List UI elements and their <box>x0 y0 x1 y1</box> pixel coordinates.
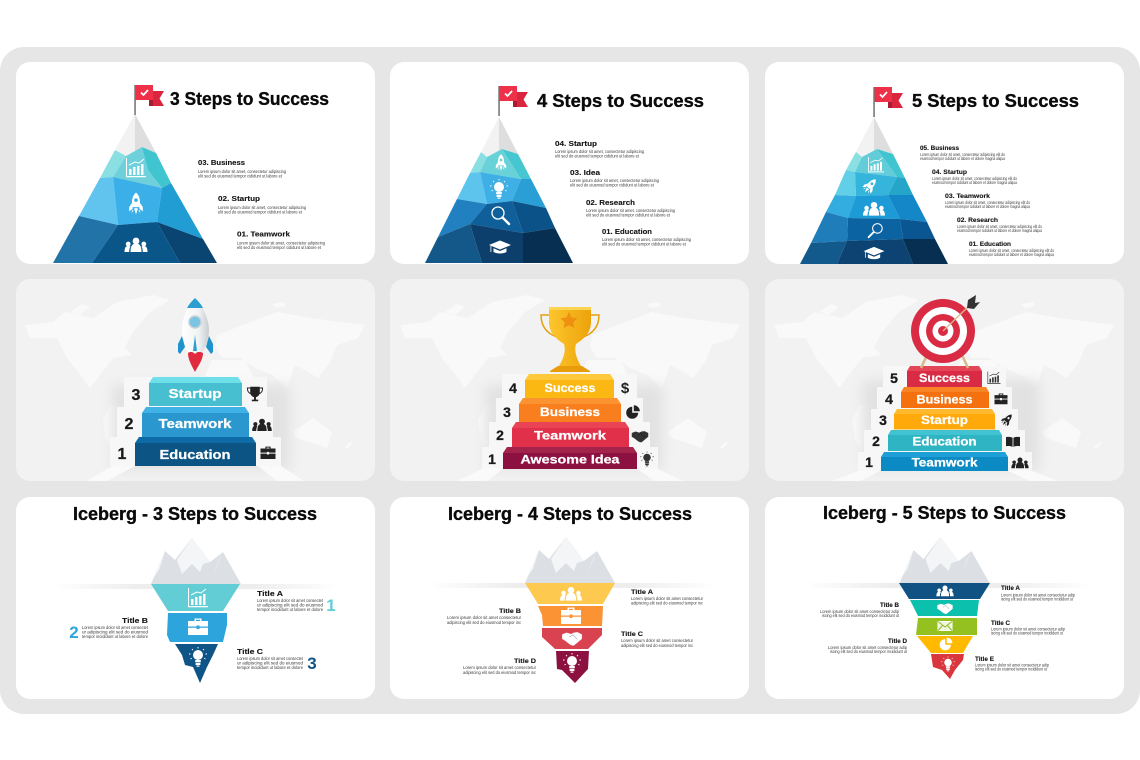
text: teamwork: Lorem ipsum dolor sit amet, consectetur adipiscing <box>237 240 326 246</box>
text: business: 05. Business <box>920 145 959 152</box>
icon: briefcase <box>188 618 208 635</box>
text: research <box>586 198 676 218</box>
text: teamwork: elit sed do eiusmod tempor cididunt ut labore et <box>237 245 322 250</box>
text: title b: ur adipiscing elit sed do eiusmod <box>82 630 149 634</box>
section 5 <box>931 654 964 679</box>
text: title c <box>991 621 1066 636</box>
text: title e: Lorem ipsum dolor sit amet consectetur adip <box>975 662 1050 668</box>
text: title a: adipiscing elit sed do eiusmod tempor inc <box>631 600 703 606</box>
icon: rocket <box>861 176 880 195</box>
step 2: teamwork: Teamwork <box>534 428 606 442</box>
step 5: success <box>907 366 982 387</box>
stone steps <box>858 366 1032 471</box>
text: title d: adipiscing elit sed do eiusmod tempor inc <box>463 670 536 675</box>
world map <box>774 295 1114 450</box>
text: title c: Lorem ipsum dolor sit amet consectetur adip <box>991 626 1066 632</box>
panel: stairs 5 steps <box>765 279 1124 481</box>
stair shadow <box>485 385 663 470</box>
icon: briefcase <box>561 608 581 624</box>
text: teamwork: 01. Teamwork <box>237 230 291 238</box>
section 2 <box>538 606 603 626</box>
panel: mountain 4 steps <box>390 62 749 264</box>
text: education: Lorem ipsum dolor sit amet, consectetur adipiscing elit do <box>969 248 1055 253</box>
icon: book <box>1006 437 1020 447</box>
text: title c: Title C <box>237 647 264 656</box>
icon: trophy <box>247 387 263 401</box>
iceberg top <box>151 538 241 584</box>
step 3: business: Business <box>540 405 600 419</box>
step numbers: 3 <box>132 387 141 404</box>
icon: chart <box>868 157 884 172</box>
panel: iceberg 5 steps <box>765 497 1124 699</box>
icon: bulb <box>189 647 207 667</box>
icon: pie <box>940 638 952 650</box>
section 3 <box>175 644 218 683</box>
text: title e <box>975 657 1050 672</box>
text: education: 01. Education <box>602 227 652 236</box>
step 3: startup: Startup <box>168 386 222 401</box>
section 2 <box>910 600 979 616</box>
number 1: 1 <box>326 596 336 615</box>
text: idea <box>570 168 660 188</box>
icon: magnifier <box>492 207 509 224</box>
step 2: teamwork <box>512 422 629 447</box>
icon: rocket <box>496 154 506 171</box>
step 3: startup <box>149 377 242 406</box>
text: startup: Lorem ipsum dolor sit amet, consectetur adipiscing <box>555 149 645 154</box>
icon: handshake <box>937 603 953 614</box>
text: startup: elit sed do eiusmod tempor cididunt ut labore et <box>218 210 303 214</box>
mountain <box>425 117 573 263</box>
icon: envelope <box>938 622 952 630</box>
icon: people <box>252 419 272 431</box>
step numbers: 2 <box>872 433 880 449</box>
text: business: 03. Business <box>198 158 245 167</box>
text: title b: Lorem ipsum dolor sit amet consectet <box>82 625 149 630</box>
text: idea: elit sed do eiusmod tempor cididunt ut labore et <box>570 182 655 188</box>
text: title c: Lorem ipsum dolor sit amet consectet <box>237 656 304 661</box>
text: title d <box>463 658 537 675</box>
text: business: Lorem ipsum dolor sit amet, consectetur adipiscing <box>198 169 287 174</box>
step numbers: 1 <box>118 446 127 463</box>
mountain <box>800 117 948 264</box>
stone steps <box>110 377 281 466</box>
text: startup: 04. Startup <box>932 169 967 176</box>
text: title b <box>82 616 149 639</box>
text: research: Lorem ipsum dolor sit amet, consectetur adipiscing <box>586 208 676 213</box>
number 3: 3 <box>307 654 317 673</box>
waterline <box>802 583 1092 588</box>
text: title a: iscing elit sed do eiusmod tempor incididunt ut <box>1001 596 1074 602</box>
text: title a: Lorem ipsum dolor sit amet consectet <box>257 598 324 603</box>
text: title b: Title B <box>880 603 900 609</box>
icon: briefcase <box>994 393 1008 404</box>
text: startup: eiusmod tempor cididunt ut labore et dolore magna aliqua <box>932 180 1018 185</box>
title: 4 Steps to Success <box>537 91 704 111</box>
step 3: startup: Startup <box>921 415 968 427</box>
text: title a: ur adipiscing elit sed do eiusmod <box>257 602 324 608</box>
step numbers: 1 <box>488 451 496 467</box>
icon: chart <box>126 158 146 177</box>
text: teamwork <box>237 230 326 250</box>
icon: graduation cap <box>864 247 884 259</box>
text: title d: Lorem ipsum dolor sit amet consectetur <box>463 665 537 670</box>
step 4: business <box>901 387 989 408</box>
text: title c: Title C <box>621 631 643 638</box>
title: 3 Steps to Success <box>170 89 329 109</box>
text: research: elit sed do eiusmod tempor cididunt ut labore et <box>586 212 671 218</box>
target <box>911 295 980 368</box>
text: title d: Title D <box>514 658 536 665</box>
text: title b: Lorem ipsum dolor sit amet consectetur adip <box>820 609 900 614</box>
step 4: success <box>525 374 614 398</box>
text: teamwork <box>945 193 1031 209</box>
step 1: education: Education <box>160 447 231 462</box>
text: research: 02. Research <box>957 217 998 224</box>
text: title c: ur adipiscing elit sed do eiusmod <box>237 660 304 666</box>
step numbers: 2 <box>125 416 134 433</box>
text: title a <box>257 589 324 612</box>
text: education: eiusmod tempor cididunt ut labore et dolore magna aliqua <box>969 252 1055 257</box>
icon: chart <box>988 372 1000 384</box>
icon: graduation cap <box>489 240 511 254</box>
step 1: education <box>135 437 256 466</box>
text: title b <box>820 603 900 618</box>
text: title c: Lorem ipsum dolor sit amet consectetur <box>621 638 694 643</box>
step 5: success: Success <box>919 373 970 385</box>
text: title b: Title B <box>499 608 521 615</box>
text: education <box>602 227 692 246</box>
section 1 <box>525 583 615 604</box>
text: startup: Lorem ipsum dolor sit amet, consectetur adipiscing elit do <box>932 176 1018 181</box>
text: startup: Lorem ipsum dolor sit amet, consectetur adipiscing <box>218 205 307 210</box>
step 3: startup <box>894 409 995 430</box>
trophy <box>541 307 599 372</box>
panel: mountain 3 steps <box>16 62 375 264</box>
rocket <box>178 298 213 372</box>
title: Iceberg - 3 Steps to Success <box>73 504 317 524</box>
step numbers: 1 <box>865 454 873 470</box>
panel: iceberg 4 steps <box>390 497 749 699</box>
step numbers: 3 <box>503 404 511 420</box>
icon: briefcase <box>260 447 276 459</box>
text: title a: tempor incididunt ut labore et dolore <box>257 607 324 612</box>
text: research <box>957 217 1043 233</box>
icon: handshake <box>632 431 648 442</box>
text: title b: tempor incididunt ut labore et dolore <box>82 634 149 639</box>
icon: people <box>124 238 148 252</box>
text: title d: Title D <box>888 639 908 645</box>
text: title c: adipiscing elit sed do eiusmod tempor inc <box>621 643 693 648</box>
text: startup: 02. Startup <box>218 194 260 203</box>
text: title e: iscing elit sed do eiusmod tempor incididunt ut <box>975 666 1048 672</box>
text: education: Lorem ipsum dolor sit amet, consectetur adipiscing <box>602 237 692 242</box>
stone steps <box>482 374 658 469</box>
icon: pie <box>626 405 640 419</box>
text: title a: Title A <box>1001 586 1021 592</box>
step 1: awesome idea: Awesome Idea <box>520 452 620 466</box>
text: title a: Lorem ipsum dolor sit amet consectetur <box>631 596 704 601</box>
waterline <box>52 584 342 589</box>
title: Iceberg - 5 Steps to Success <box>823 503 1066 523</box>
text: title c: iscing elit sed do eiusmod tempor incididunt ut <box>991 630 1064 636</box>
text: title c: Title C <box>991 621 1011 627</box>
step 4: success: Success <box>544 381 596 395</box>
icon: bulb <box>941 656 955 671</box>
icon: chart <box>188 588 208 607</box>
text: idea: Lorem ipsum dolor sit amet, consectetur adipiscing <box>570 178 660 183</box>
panel: iceberg 3 steps <box>16 497 375 699</box>
step numbers <box>118 387 141 463</box>
panel: stairs 4 steps <box>390 279 749 481</box>
icon: people <box>936 585 954 596</box>
section 3 <box>916 618 977 635</box>
icon: flag <box>498 86 528 116</box>
title: 5 Steps to Success <box>912 91 1079 111</box>
section 4 <box>917 636 973 653</box>
step 1: teamwork: Teamwork <box>912 458 978 470</box>
text: business: Lorem ipsum dolor sit amet, consectetur adipiscing elit do <box>920 152 1006 157</box>
road <box>832 471 1058 481</box>
number 2: 2 <box>69 623 79 642</box>
text: title a: Title A <box>631 589 653 596</box>
text: title b: Lorem ipsum dolor sit amet consectetur <box>447 615 522 620</box>
icon: dollar: $ <box>621 380 630 397</box>
world map <box>25 295 365 450</box>
icon: magnifier <box>869 224 882 237</box>
step 1: teamwork <box>881 452 1008 471</box>
text: title b: iscing elit sed do eiusmod tempor incididunt ut <box>822 613 900 618</box>
text: title d <box>828 639 908 654</box>
step numbers: 2 <box>496 427 504 443</box>
step numbers <box>865 370 898 470</box>
text: business: elit sed do eiusmod tempor cididunt ut labore et <box>198 174 283 178</box>
stair shadow <box>112 385 290 470</box>
text: research: 02. Research <box>586 198 635 207</box>
text: teamwork: 03. Teamwork <box>945 193 990 200</box>
text: startup: 04. Startup <box>555 139 597 148</box>
text: startup <box>218 194 307 214</box>
icon: flag <box>873 87 903 117</box>
text: business <box>198 158 287 178</box>
section 2 <box>167 613 227 642</box>
icon: handshake <box>562 632 582 646</box>
step numbers: 3 <box>879 412 887 428</box>
step numbers <box>488 380 517 467</box>
text: title b <box>447 608 522 625</box>
text: research: Lorem ipsum dolor sit amet, consectetur adipiscing elit do <box>957 224 1043 229</box>
step 4: business: Business <box>916 394 972 406</box>
icon: people <box>560 587 582 601</box>
icon: people <box>863 202 885 216</box>
iceberg top <box>525 537 615 583</box>
step 2: education: Education <box>912 436 976 448</box>
icon: rocket <box>129 192 143 214</box>
stair shadow <box>862 380 1040 470</box>
text: title e: Title E <box>975 657 994 663</box>
text: title b: adipiscing elit sed do eiusmod tempor inc <box>447 620 521 625</box>
text: title c: tempor incididunt ut labore et dolore <box>237 665 304 670</box>
icon: people <box>1011 457 1029 468</box>
text: title d: iscing elit sed do eiusmod tempor incididunt ut <box>830 649 908 654</box>
text: title b: Title B <box>122 616 149 625</box>
text: title a <box>1001 586 1076 602</box>
step numbers: 5 <box>890 370 898 386</box>
title: Iceberg - 4 Steps to Success <box>448 504 692 524</box>
text: startup <box>932 169 1018 185</box>
panel: mountain 5 steps <box>765 62 1124 264</box>
road <box>457 469 683 481</box>
text: research: eiusmod tempor cididunt ut labore et dolore magna aliqua <box>957 228 1043 233</box>
step numbers: 4 <box>509 380 517 396</box>
text: startup: elit sed do eiusmod tempor cididunt ut labore et <box>555 154 640 158</box>
text: business <box>920 145 1006 161</box>
iceberg top <box>900 537 990 583</box>
text: teamwork: Lorem ipsum dolor sit amet, consectetur adipiscing elit do <box>945 200 1031 205</box>
section 1 <box>151 584 240 611</box>
text: title c <box>237 647 304 670</box>
road <box>87 466 304 481</box>
panel: stairs 3 steps <box>16 279 375 481</box>
text: education <box>969 241 1055 257</box>
step 2: teamwork: Teamwork <box>158 416 232 431</box>
step 1: awesome idea <box>503 447 637 469</box>
text: education: elit sed do eiusmod tempor cididunt ut labore et <box>602 242 687 246</box>
text: title a: Lorem ipsum dolor sit amet consectetur adip <box>1001 592 1076 598</box>
text: idea: 03. Idea <box>570 168 601 177</box>
text: education: 01. Education <box>969 241 1011 248</box>
text: business: eiusmod tempor cididunt ut labore et dolore magna aliqua <box>920 156 1006 161</box>
text: startup <box>555 139 645 158</box>
section 3 <box>542 628 602 649</box>
text: teamwork: eiusmod tempor cididunt ut labore et dolore magna aliqua <box>945 204 1031 209</box>
text: title a <box>631 589 704 606</box>
text: title c <box>621 631 694 648</box>
step 3: business <box>519 398 621 422</box>
icon: bulb <box>563 653 581 673</box>
icon: flag <box>134 85 164 115</box>
waterline <box>427 583 717 588</box>
step numbers: 4 <box>885 391 893 407</box>
text: title a: Title A <box>257 589 284 598</box>
world map <box>400 295 740 450</box>
section 1 <box>899 583 990 599</box>
icon: rocket <box>1000 412 1015 428</box>
text: title d: Lorem ipsum dolor sit amet consectetur adip <box>828 645 908 650</box>
section 4 <box>556 651 589 683</box>
step 2: teamwork <box>142 407 249 437</box>
icon: bulb <box>640 452 654 466</box>
mountain <box>53 114 217 263</box>
icon: bulb <box>490 179 508 199</box>
step 2: education <box>888 430 1002 451</box>
